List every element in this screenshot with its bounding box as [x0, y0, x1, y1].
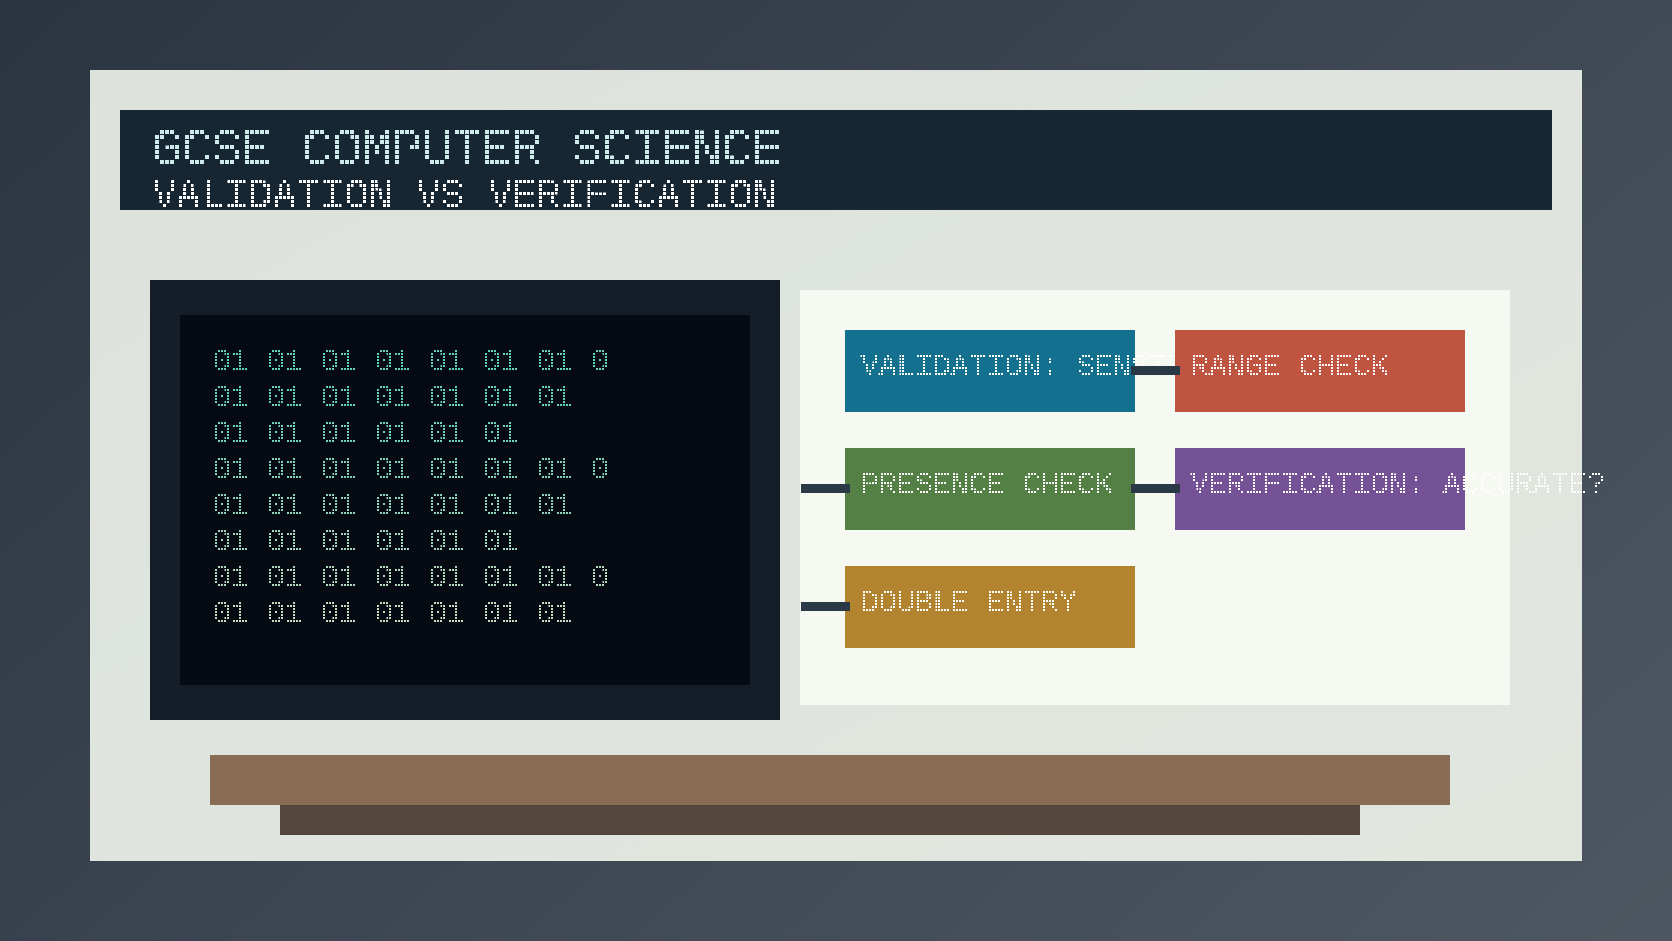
binary line 5: 01 01 01 01 01 01 01: [213, 490, 573, 524]
title: GCSE COMPUTER SCIENCE: [152, 123, 782, 180]
binary line 6: 01 01 01 01 01 01: [213, 526, 519, 560]
connector: into presence check: [801, 484, 850, 493]
connector: validation to range check: [1131, 366, 1180, 375]
box: presence check: [845, 448, 1135, 530]
box: presence check: PRESENCE CHECK: [861, 469, 1113, 503]
box: double entry: DOUBLE ENTRY: [861, 587, 1077, 621]
binary line 1: 01 01 01 01 01 01 01 0: [213, 346, 609, 380]
monitor screen: [180, 315, 750, 685]
box: verification: VERIFICATION: ACCURATE?: [1191, 469, 1605, 503]
desk top: [210, 755, 1450, 805]
binary line 4: 01 01 01 01 01 01 01 0: [213, 454, 609, 488]
binary line 3: 01 01 01 01 01 01: [213, 418, 519, 452]
panel: flowchart background: [800, 290, 1510, 705]
box: verification: [1175, 448, 1605, 530]
box: validation: [845, 330, 1239, 412]
box: range check: RANGE CHECK: [1191, 351, 1389, 385]
binary line 2: 01 01 01 01 01 01 01: [213, 382, 573, 416]
box: range check: [1175, 330, 1465, 412]
header banner: [120, 110, 1552, 220]
binary line 7: 01 01 01 01 01 01 01 0: [213, 562, 609, 596]
box: validation: VALIDATION: SENSIBLE?: [861, 351, 1239, 385]
binary line 8: 01 01 01 01 01 01 01: [213, 598, 573, 632]
desk base: [280, 805, 1360, 835]
panel: computer monitor with binary: [150, 280, 780, 720]
connector: presence check to verification: [1131, 484, 1180, 493]
poster frame: [90, 70, 1582, 861]
subtitle: VALIDATION VS VERIFICATION: [152, 175, 777, 220]
connector: into double entry: [801, 602, 850, 611]
box: double entry: [845, 566, 1135, 648]
